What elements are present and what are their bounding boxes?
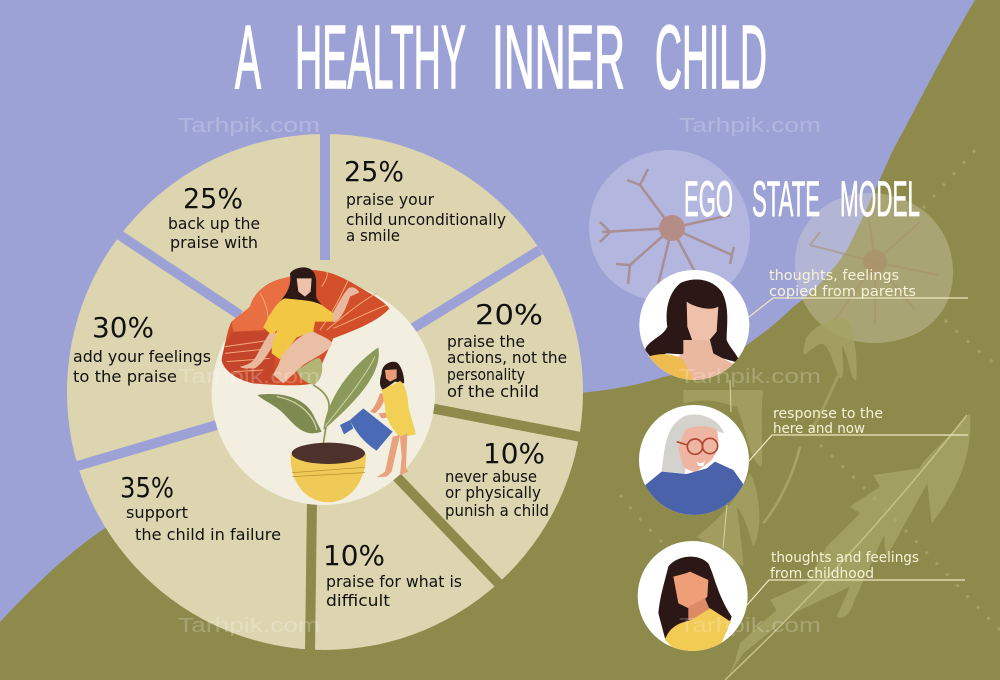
title: HEALTHY [295, 8, 466, 108]
slice 35% [120, 471, 281, 544]
pot [291, 443, 366, 502]
slice 20%: personality [447, 365, 525, 384]
slice 35%: the child in failure [135, 525, 281, 544]
centre illustration [212, 267, 435, 505]
slice 25% praise: 25% [344, 155, 404, 188]
slice dividers [74, 132, 586, 652]
slice 30%: 30% [92, 311, 154, 344]
small top leaf [803, 319, 857, 430]
callout: here and now: here and now [773, 421, 865, 437]
slice 10% abuse [445, 437, 549, 520]
slice 10% difficult [323, 539, 462, 610]
callout: parents: thoughts, feelings [769, 268, 899, 284]
callout: childhood [747, 550, 965, 605]
plant [257, 347, 379, 453]
slice 25% back up: 25% [183, 182, 243, 215]
callout: parents: copied from parents [769, 284, 916, 300]
watermarks: Tarhpik.com [679, 615, 821, 637]
watermarks: Tarhpik.com [178, 615, 320, 637]
callout: here and now [749, 406, 968, 461]
leaves background [683, 390, 970, 680]
slice 20%: of the child [447, 382, 539, 401]
slice 25% praise: a smile [346, 226, 400, 245]
title: A [235, 8, 261, 108]
watermarks: Tarhpik.com [679, 366, 821, 388]
slice 30%: to the praise [73, 367, 177, 386]
dotted decoration [620, 150, 1000, 630]
watermarks: Tarhpik.com [679, 115, 821, 137]
woman on flower [240, 267, 359, 383]
watermarks: Tarhpik.com [178, 366, 320, 388]
connector line between portraits [723, 380, 731, 548]
slice 30%: add your feelings [73, 347, 211, 366]
slice 10% abuse: or physically [445, 483, 541, 502]
text: CHILD [655, 8, 767, 108]
slice 10% abuse: 10% [483, 437, 545, 470]
slice 10% difficult: praise for what is [326, 572, 462, 591]
girl with watering can [340, 362, 416, 477]
slice 20%: praise the [447, 332, 525, 351]
dandelion right [795, 193, 953, 343]
slice 25% praise: child unconditionally [346, 210, 506, 229]
slice 20%: actions, not the [447, 348, 567, 367]
slice 35%: 35% [120, 471, 174, 504]
callout: childhood: from childhood [770, 566, 874, 582]
portrait: child [638, 541, 748, 653]
slice 20% [447, 298, 567, 401]
pie chart [67, 132, 586, 652]
slice 35%: support [126, 503, 188, 522]
flower petals [222, 270, 389, 385]
title: INNER [492, 8, 625, 108]
stem leaves [683, 390, 763, 467]
big leaf [727, 413, 970, 680]
leaf stem [725, 415, 967, 680]
slice 10% abuse: punish a child [445, 501, 549, 520]
slice 20%: 20% [475, 298, 543, 331]
section heading: ego state model: STATE [752, 171, 820, 227]
portrait: parent [639, 270, 749, 383]
callout: here and now: response to the [773, 406, 883, 422]
slice 25% back up: praise with [170, 233, 258, 252]
portrait: adult [639, 405, 749, 517]
slice 25% praise: praise your [346, 190, 434, 209]
callout: parents [749, 268, 968, 317]
slice 25% back up [168, 182, 260, 252]
slice 10% difficult: difficult [326, 591, 390, 610]
slice 25% back up: back up the [168, 214, 260, 233]
callout: childhood: thoughts and feelings [771, 550, 919, 566]
watermarks [178, 115, 821, 637]
section heading: ego state model: EGO [684, 171, 733, 227]
slice 30% [73, 311, 211, 386]
section heading: ego state model [684, 171, 920, 227]
slice 10% abuse: never abuse [445, 467, 537, 486]
watermarks: Tarhpik.com [178, 115, 320, 137]
slice 10% difficult: 10% [323, 539, 385, 572]
dandelion left [589, 150, 750, 303]
slice 25% praise [344, 155, 506, 245]
